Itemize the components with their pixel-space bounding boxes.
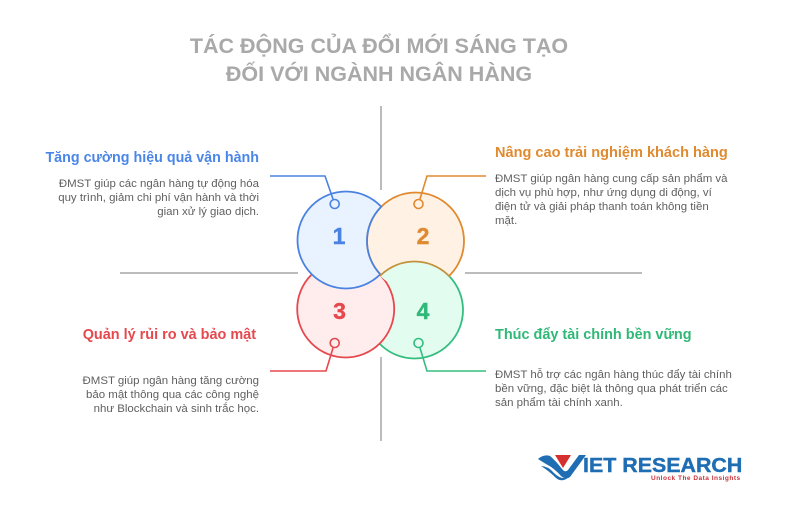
title (190, 34, 568, 86)
logo mark (538, 455, 586, 480)
heading 4: Thúc đẩy tài chính bền vững (495, 327, 692, 343)
number 4: 4 (417, 298, 430, 324)
connector 3 (270, 338, 339, 371)
text 4: sản phẩm tài chính xanh. (495, 397, 623, 409)
number 1: 1 (333, 223, 346, 249)
circle 2 left arc (366, 206, 382, 275)
title: TÁC ĐỘNG CỦA ĐỔI MỚI SÁNG TẠO (190, 34, 568, 58)
logo tagline: Unlock The Data Insights (651, 475, 741, 482)
text 3: bảo mật thông qua các công nghệ (86, 389, 259, 401)
text 2: dịch vụ phù hợp, như ứng dụng di động, ví (495, 187, 712, 199)
text 4: ĐMST hỗ trợ các ngân hàng thúc đẩy tài chính (495, 369, 732, 381)
connector 2 (414, 176, 486, 208)
text 3 (82, 375, 259, 415)
circle 2 (367, 192, 464, 290)
text 1 (58, 178, 259, 218)
circle 1 (298, 192, 394, 288)
text 2 (495, 173, 728, 227)
text 4: bền vững, đặc biệt là thông qua phát triển các (495, 383, 728, 395)
circle 4 top overlap (380, 260, 450, 290)
text 4 (495, 368, 732, 409)
logo name: IET RESEARCH (583, 455, 742, 477)
circle 3 (297, 260, 394, 358)
text 1: gian xử lý giao dịch. (157, 206, 259, 218)
text 2: ĐMST giúp ngân hàng cung cấp sản phẩm và (495, 173, 728, 185)
text 1: ĐMST giúp các ngân hàng tự động hóa (59, 178, 259, 190)
text 3: như Blockchain và sinh trắc học. (94, 403, 259, 415)
text 3: ĐMST giúp ngân hàng tăng cường (83, 375, 259, 387)
connector 1 (270, 176, 339, 208)
text 2: mặt. (495, 215, 517, 227)
heading 2: Nâng cao trải nghiệm khách hàng (495, 145, 728, 161)
heading 1: Tăng cường hiệu quả vận hành (45, 150, 259, 166)
title: ĐỐI VỚI NGÀNH NGÂN HÀNG (226, 62, 532, 86)
text 2: điện tử và giải pháp thanh toán không tiền (495, 201, 709, 213)
text 1: quy trình, giảm chi phí vận hành và thời (58, 192, 259, 204)
circle 4 (366, 262, 463, 358)
heading 3: Quản lý rủi ro và bảo mật (83, 327, 256, 343)
connector 4 (414, 338, 486, 371)
number 3: 3 (333, 298, 346, 324)
diagram: four overlapping circles (120, 106, 642, 480)
number 2: 2 (417, 223, 429, 249)
